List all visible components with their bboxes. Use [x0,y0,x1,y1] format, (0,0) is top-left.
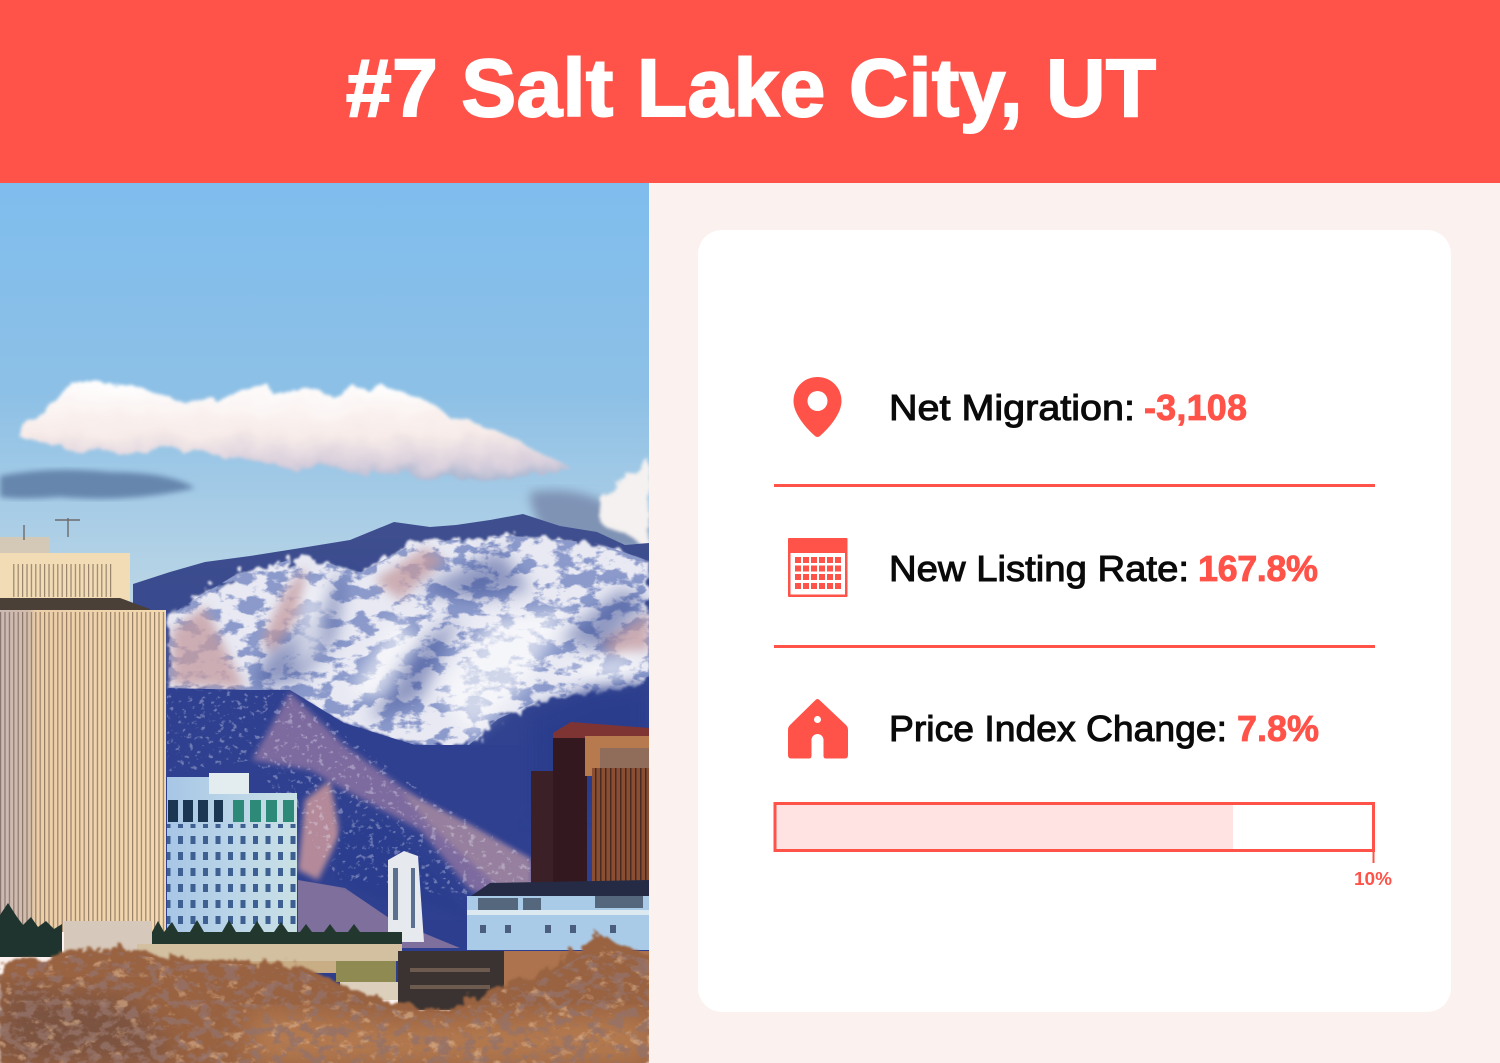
net migration stat: Net Migration: [889,387,1135,428]
brown office building [531,722,649,886]
icon: house [788,699,848,758]
icon: location pin [794,377,842,437]
icon: calendar [788,538,848,597]
low rooftop and cream block [0,903,649,1013]
net migration stat [889,387,1247,428]
foreground ridge [167,684,649,948]
mountain rock and forest shading [172,548,649,735]
price index change stat: 7.8% [1237,708,1319,749]
sky [0,183,649,603]
mountain range [133,514,649,1000]
price index change stat: Price Index Change: [889,708,1227,749]
new listing rate stat: 167.8% [1198,548,1318,589]
left office tower [0,518,166,932]
net migration stat: -3,108 [1144,387,1247,428]
photo: Salt Lake City skyline with snowy mountains [0,183,649,1063]
clouds [0,381,649,550]
small white tower [388,851,424,942]
title: #7 Salt Lake City, UT [346,43,1156,134]
title banner [0,0,1500,183]
stats card [698,230,1451,1012]
pale blue building [167,773,297,936]
new listing rate stat [889,548,1318,589]
white domed building [467,880,649,950]
new listing rate stat: New Listing Rate: [889,548,1189,589]
progress bar: price index change 7.8% of 10% [774,802,1392,889]
progress bar: price index change 7.8% of 10%: 10% [1354,869,1392,889]
bare trees foreground [0,935,649,1063]
